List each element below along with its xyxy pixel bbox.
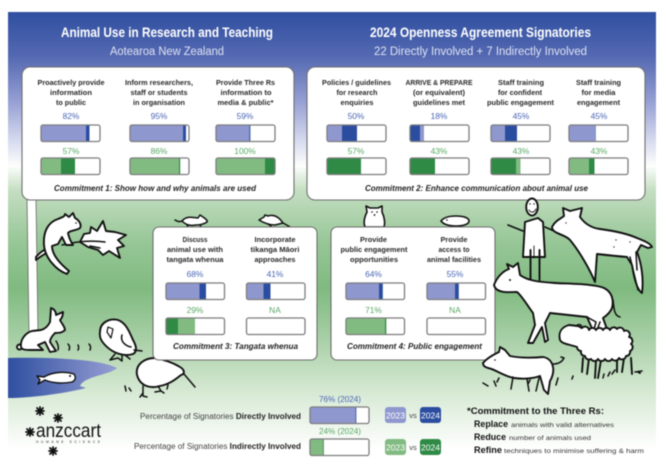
item: incorporate tikanga Māori: NA [269,305,281,315]
item: proactively provide information: 57% [63,146,80,156]
icon: hamster [364,206,385,227]
item: inform researchers: staff or students [130,88,188,97]
item: provide three Rs information [216,78,275,174]
legend: directly involved: Percentage of Signatories Directly Involved [140,412,301,421]
item: access to animal facilities: NA [449,305,461,315]
illustration: pig [483,347,564,394]
item: staff training media engagement: 43% [591,146,608,156]
item: staff training media engagement [569,78,628,174]
item: public engagement opportunities: Provide [360,235,387,244]
illustration: person [508,198,554,280]
panel: commitment 2 [307,67,645,200]
subtitle: signatory counts: 22 Directly Involved + 7 Indirectly Involved [374,46,587,58]
caption: commitment 3: Commitment 3: Tangata whenua [173,341,298,351]
item: policies guidelines [322,78,391,174]
icon: guinea pig [441,216,469,226]
legend: directly involved [140,394,369,424]
panel: commitment 4 [331,227,495,360]
item: incorporate tikanga Māori [246,235,305,334]
text block: commitment to the Three Rs: number of animals used [509,435,591,442]
item: discuss with tangata whenua [166,235,224,334]
illustration: deer [552,208,652,293]
item: ARRIVE and PREPARE: guidelines met [413,98,465,107]
panel: commitment 3 [153,227,317,360]
item: inform researchers: 86% [151,146,168,156]
item: staff training public engagement: Staff training [498,78,544,87]
item: provide three Rs information: 100% [234,146,256,156]
item: staff training public engagement [487,78,554,174]
legend: blue year key [385,407,441,423]
item: staff training media engagement: 45% [591,111,608,121]
legend: blue year key: vs [409,411,417,420]
item: proactively provide information: 82% [63,111,80,121]
illustration: rabbit [17,308,91,352]
item: proactively provide information: to public [56,98,86,107]
item: policies guidelines: 57% [348,146,365,156]
item: ARRIVE and PREPARE: 18% [431,111,448,121]
item: provide three Rs information: 59% [237,111,254,121]
item: inform researchers: in organisation [133,98,185,107]
item: policies guidelines: for research [336,88,378,97]
item: public engagement opportunities: opportunities [350,255,398,264]
icon: rat right [259,215,292,228]
caption: commitment 4: Commitment 4: Public engagement [347,341,483,351]
legend: green year key: vs [409,443,417,452]
legend: green year key [385,439,441,455]
item: incorporate tikanga Māori: 41% [267,269,284,279]
tagline: HUMANE SCIENCE [36,440,101,444]
item: proactively provide information: Proactively provide [38,78,104,87]
item: access to animal facilities [427,235,486,334]
illustration: lake [8,358,117,398]
item: provide three Rs information: information to [220,88,272,97]
item: inform researchers [125,78,193,174]
text block: commitment to the Three Rs: Reduce [474,432,506,443]
illustration: possum on branch with leaf [36,213,126,274]
text block: commitment to the Three Rs: Refine [474,445,502,456]
item: access to animal facilities: 55% [447,269,464,279]
item: staff training media engagement: engagement [577,98,620,107]
item: public engagement opportunities: public engagement [340,245,408,254]
item: staff training public engagement: public engagement [487,98,554,107]
icon: rat left [175,215,207,227]
legend: indirectly involved: Percentage of Signatories Indirectly Involved [134,442,301,451]
item: discuss with tangata whenua: Discuss [182,235,208,244]
caption: commitment 2: Commitment 2: Enhance communication about animal use [365,183,588,193]
item: access to animal facilities: animal facilities [427,255,481,264]
item: ARRIVE and PREPARE: (or equivalent) [413,88,465,97]
text block: commitment to the Three Rs [467,406,644,456]
icon: tree trunk [27,198,38,334]
icon: southern cross stars [26,407,62,455]
item: inform researchers: Inform researchers, [125,78,193,87]
illustration: kiwi [125,358,195,397]
legend: green year key: 2024 [421,442,440,452]
illustration: bird [100,320,142,361]
item: policies guidelines: enquiries [340,98,374,107]
item: staff training public engagement: 43% [513,146,530,156]
panel: commitment 1 [22,67,294,200]
wordmark: anzccart [36,420,102,442]
item: incorporate tikanga Māori: approaches [254,255,296,264]
item: ARRIVE and PREPARE: ARRIVE & PREPARE [406,78,472,87]
item: public engagement opportunities [340,235,408,334]
item: ARRIVE and PREPARE: 43% [431,146,448,156]
item: proactively provide information [38,78,104,174]
text block: commitment to the Three Rs: animals with valid alternatives [511,422,615,429]
item: provide three Rs information: media & public* [218,98,274,107]
text block: commitment to the Three Rs: *Commitment to the Three Rs: [467,406,604,417]
illustration: cow [494,263,620,343]
item: staff training media engagement: Staff training [576,78,621,87]
item: policies guidelines: Policies / guidelines [322,78,391,87]
text block: commitment to the Three Rs: Replace [474,419,508,430]
legend: blue year key: 2023 [386,410,405,420]
item: ARRIVE and PREPARE [406,78,472,174]
item: access to animal facilities: Provide [440,235,468,244]
item: public engagement opportunities: 71% [365,305,382,315]
title: signatories: 2024 Openness Agreement Signatories [370,24,591,40]
item: provide three Rs information: Provide Three Rs [216,78,275,87]
legend: directly involved: 76% (2024) [319,394,361,404]
item: staff training public engagement: for confident [498,88,542,97]
legend: green year key: 2023 [386,442,405,452]
legend: blue year key: 2024 [421,410,440,420]
item: access to animal facilities: access to [438,245,470,254]
item: proactively provide information: information [50,88,92,97]
legend: indirectly involved: 24% (2024) [319,426,361,436]
item: incorporate tikanga Māori: tikanga Māori [250,245,300,254]
item: incorporate tikanga Māori: Incorporate [254,235,296,244]
subtitle: Aotearoa New Zealand: Aotearoa New Zealand [110,46,224,58]
text block: commitment to the Three Rs: techniques to minimise suffering & harm [504,448,644,455]
logo: anzccart [26,407,102,455]
item: discuss with tangata whenua: tangata whenua [166,255,224,264]
item: public engagement opportunities: 64% [365,269,382,279]
item: discuss with tangata whenua: 29% [187,305,204,315]
item: staff training media engagement: for media [582,88,616,97]
title: animal use: Animal Use in Research and Teaching [61,24,273,40]
item: staff training public engagement: 45% [513,111,530,121]
illustration: sheep [559,325,642,379]
icon: fish [37,372,75,384]
item: discuss with tangata whenua: animal use with [167,245,223,254]
legend: indirectly involved [134,426,369,456]
item: discuss with tangata whenua: 68% [187,269,204,279]
item: policies guidelines: 50% [348,111,365,121]
caption: commitment 1: Commitment 1: Show how and why animals are used [54,183,257,193]
item: inform researchers: 95% [151,111,168,121]
